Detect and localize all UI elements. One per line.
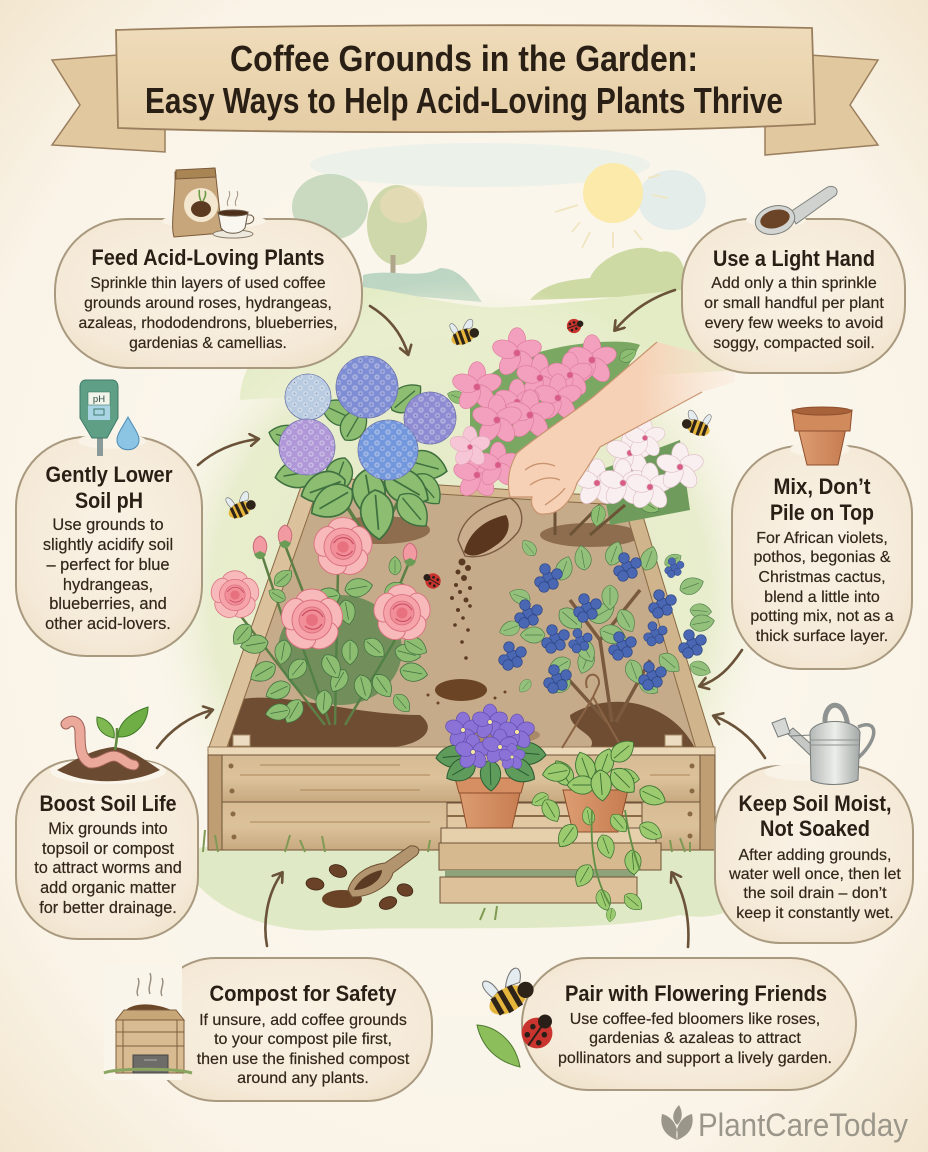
body text: blueberries, and [49,595,167,613]
body text: every few weeks to avoid [705,315,883,332]
body text: grounds around roses, hydrangeas, [84,295,332,312]
pale pink blossom [448,426,492,468]
stems [330,470,410,535]
arrows [157,290,765,947]
icon: pH meter and water drop: pH [93,394,105,405]
body text [704,275,884,352]
body text: to attract worms and [34,859,182,877]
heading: Use a Light Hand [713,246,875,271]
body text: the soil drain – don’t [743,885,887,902]
body text: blend a little into [764,589,880,606]
grass under the bed [178,839,750,930]
body text: Add only a thin sprinkle [711,275,877,292]
body text: pothos, begonias & [754,549,891,566]
icon: terracotta pot [792,407,852,465]
dark soil patches [228,516,695,748]
rose blooms [208,518,434,654]
pink blossoms [450,328,619,499]
banner title [52,25,878,155]
heading [738,791,892,841]
body text: thick surface layer. [756,628,888,645]
white blossoms [571,417,706,511]
hanging pothos basket [529,675,669,923]
body text: topsoil or compost [42,840,175,858]
icon gap in outline [790,441,850,457]
hanging pot [563,790,628,832]
blueberry bush [497,537,716,722]
body text: Use coffee-fed bloomers like roses, [570,1011,820,1028]
body text: pollinators and support a lively garden. [558,1050,832,1067]
title text [145,38,783,121]
grounds pile [322,890,362,908]
beans [305,862,415,912]
body text: other acid-lovers. [45,615,171,633]
bubble [715,766,913,943]
arm and hand [508,342,735,514]
title text: Easy Ways to Help Acid-Loving Plants Thrive [145,80,783,121]
falling grounds [450,558,472,660]
violet leaves [435,741,547,791]
inner corner blocks [233,735,682,746]
azalea foliage [470,342,640,480]
rose bush [208,518,434,727]
body text: keep it constantly wet. [736,905,894,922]
body text [78,275,338,352]
grass tufts [203,830,690,920]
body text [728,847,901,922]
blueberry leaves [497,537,716,698]
heading [770,474,874,525]
panel: compost for safety [150,958,432,1101]
side rails [208,478,320,750]
hanger [562,675,622,748]
heading: Feed Acid-Loving Plants [92,245,324,270]
panel: use a light hand [682,213,905,373]
body text: – perfect for blue [46,556,170,574]
body text: Christmas cactus, [758,569,886,586]
body text [43,516,173,633]
bubble [682,219,905,373]
body text: slightly acidify soil [43,536,173,554]
top rim of front [208,747,715,755]
icon gap in outline [162,213,266,229]
heading: Gently Lower [46,462,173,487]
bubble [522,958,856,1090]
heading [46,462,173,513]
wooden crate stand [439,803,661,903]
scoop [348,846,419,897]
hydrangea plant [266,356,456,541]
icon: pH meter and water drop [80,380,139,456]
logo wordmark: PlantCareToday [698,1107,908,1143]
violet flowers [444,704,536,771]
panel: gently lower soil pH [16,433,202,656]
body text: water well once, then let [728,866,901,883]
logo leaf mark [661,1105,693,1140]
heading: Not Soaked [760,816,870,841]
icon: watering can [764,705,874,784]
panel: feed acid-loving plants [55,213,362,368]
body text [558,1011,832,1067]
icon: measuring spoon [752,186,837,239]
heading: Keep Soil Moist, [738,791,892,816]
heading: Pile on Top [770,500,874,525]
body text: around any plants. [237,1070,369,1087]
panel: pair with flowering friends [522,958,856,1090]
icon gap in outline [746,213,806,227]
soil mound [426,679,506,704]
body text: for better drainage. [39,899,177,917]
body text: azaleas, rhododendrons, blueberries, [78,315,338,332]
pothos leaves [529,735,669,923]
front boards [208,755,715,802]
rose stems [240,545,408,725]
logo: PlantCareToday [661,1105,908,1143]
body text: After adding grounds, [738,847,892,864]
rose foliage shade [278,595,402,705]
azalea plant [445,328,706,535]
hydrangea leaves [266,377,451,541]
body text: soggy, compacted soil. [713,335,875,352]
body text: potting mix, not as a [750,608,894,625]
heading: Soil pH [75,488,143,513]
icon: bee, ladybug and leaf [476,962,562,1067]
blueberries [499,553,706,693]
blueberry stems [560,590,650,722]
body text: If unsure, add coffee grounds [199,1012,407,1029]
icon: worm and seedling [50,707,166,784]
small insects in the garden [222,316,715,592]
body text: then use the finished compost [197,1051,410,1068]
body text: Use grounds to [52,516,164,534]
coffee beans and small scoop [305,846,419,912]
bubble [732,446,912,669]
bubble [150,958,432,1101]
body text [750,530,894,645]
body text: hydrangeas, [63,576,153,594]
heading: Mix, Don’t [774,474,871,499]
body text: gardenias & camellias. [129,335,287,352]
heading: Compost for Safety [210,981,397,1006]
icon: coffee bag and cup [173,168,254,238]
bubble [55,219,362,368]
ribbon tails [52,55,878,155]
hydrangea blooms [279,356,456,480]
panel: boost soil life [16,760,198,939]
body text: to your compost pile first, [214,1031,392,1048]
panel: mix, don't pile on top [732,441,912,669]
icon: compost bin [104,965,192,1080]
panel: keep soil moist, not soaked [715,766,913,943]
grounds in scoop [464,515,509,556]
body text: For African violets, [756,530,888,547]
bubble [16,437,202,656]
body text: Mix grounds into [48,820,168,838]
terracotta pot [457,780,523,828]
body text [34,820,182,917]
hand with trowel scattering coffee grounds [450,342,735,660]
african violet in pot [435,704,547,828]
body text [197,1012,410,1087]
body text: gardenias & azaleas to attract [589,1030,801,1047]
icon gap in outline [78,433,146,449]
vines [592,810,640,905]
soil [216,482,705,750]
heading: Boost Soil Life [40,791,176,816]
body text: Sprinkle thin layers of used coffee [90,275,326,292]
landscape: sky, sun, trees and hills [150,143,770,920]
title text: Coffee Grounds in the Garden: [230,38,698,79]
scoop bowl [458,498,522,557]
body text: add organic matter [40,879,176,897]
banner panel [116,25,815,132]
rose leaves [228,556,431,727]
heading: Pair with Flowering Friends [565,981,827,1006]
bubble [16,760,198,939]
body text: or small handful per plant [704,295,884,312]
raised garden bed [203,476,715,920]
